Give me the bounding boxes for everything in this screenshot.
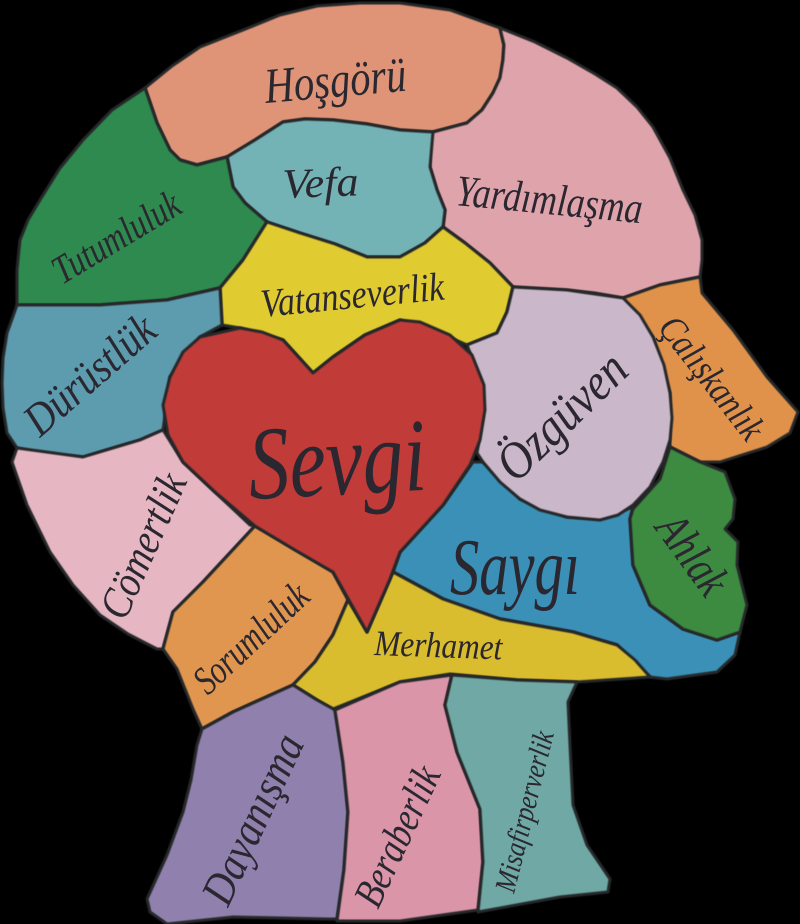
text: Saygı: Saygı xyxy=(450,524,580,612)
panel: Saygı xyxy=(393,462,740,679)
text: Beraberlik: Beraberlik xyxy=(345,758,451,914)
panel: Çalışkanlık xyxy=(623,277,798,462)
panel: Merhamet xyxy=(293,572,650,709)
panel: Hoşgörü xyxy=(145,3,504,165)
text: Özgüven: Özgüven xyxy=(485,340,639,493)
panel: Ahlak xyxy=(630,447,747,640)
text: Vefa: Vefa xyxy=(282,159,359,208)
panel: Beraberlik xyxy=(335,675,483,921)
text: Çalışkanlık: Çalışkanlık xyxy=(650,308,773,449)
text: Cömertlik: Cömertlik xyxy=(89,464,197,626)
text: Merhamet: Merhamet xyxy=(373,623,504,667)
text: Dayanışma: Dayanışma xyxy=(190,726,314,913)
panel: Dayanışma xyxy=(147,685,348,924)
panel: Vatanseverlik xyxy=(220,222,513,373)
panel: Sorumluluk xyxy=(163,526,348,729)
panel: Sevgi heart xyxy=(163,320,485,632)
text: Sevgi: Sevgi xyxy=(245,398,429,522)
text: Dürüstlük: Dürüstlük xyxy=(12,303,167,446)
panel: Vefa xyxy=(227,119,445,257)
text: Hoşgörü: Hoşgörü xyxy=(261,46,408,114)
text: Ahlak: Ahlak xyxy=(644,501,740,607)
text: Yardımlaşma: Yardımlaşma xyxy=(454,166,645,233)
panel: Yardımlaşma xyxy=(430,28,702,298)
panel: Özgüven xyxy=(467,287,672,520)
text: Sorumluluk: Sorumluluk xyxy=(183,572,319,703)
text: Tutumluluk: Tutumluluk xyxy=(43,181,189,293)
panel: Cömertlik xyxy=(12,430,255,649)
panel: Dürüstlük xyxy=(2,288,222,457)
text: Vatanseverlik: Vatanseverlik xyxy=(259,263,447,326)
panel: Misafirperverlik xyxy=(445,675,610,912)
panel: Tutumluluk xyxy=(17,88,267,305)
text: Misafirperverlik: Misafirperverlik xyxy=(489,727,561,897)
